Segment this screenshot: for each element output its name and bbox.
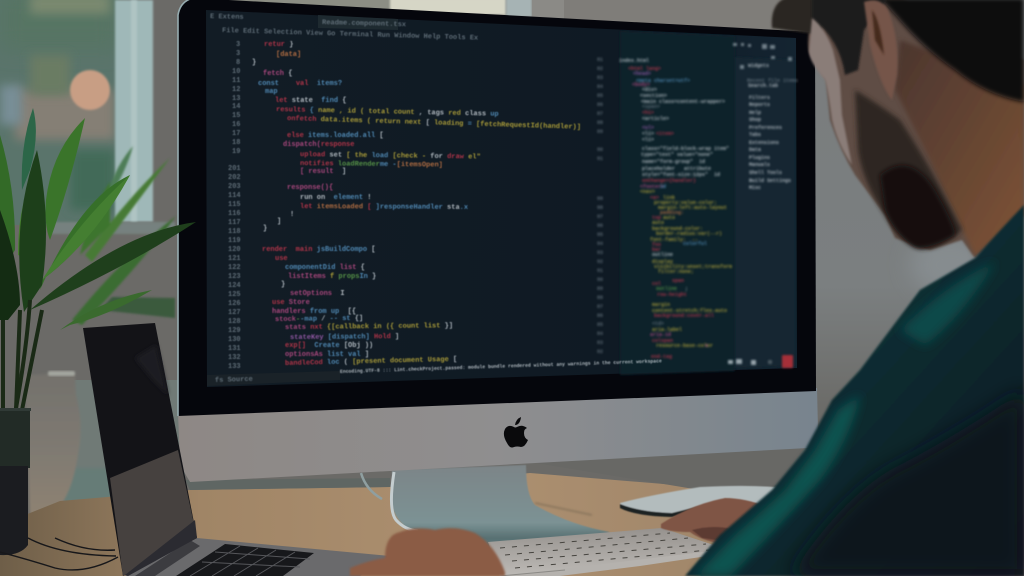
right code lines: background-color:: [652, 226, 703, 232]
line numbers: 3: [236, 41, 240, 49]
right code lines: <a>: [650, 195, 659, 201]
code editor text: [210, 13, 662, 385]
sidebar list: Preferences: [749, 125, 782, 131]
left code block: use Store: [272, 299, 310, 307]
lower wall panel and vase: [25, 371, 185, 514]
line numbers: 127: [228, 309, 241, 317]
line numbers: 201: [228, 165, 241, 173]
right code lines: <body>: [632, 82, 650, 88]
neck: [895, 40, 1024, 256]
right code lines: top: [652, 215, 661, 221]
front hair and sideburn: [812, 0, 888, 75]
left code block: componentDid list {: [285, 264, 365, 272]
active tab: [318, 15, 398, 30]
minimap line numbers: 90: [597, 277, 603, 283]
editor menu bar: [210, 13, 479, 43]
minimap line numbers: 81: [597, 57, 603, 63]
editor menu bar: File Edit Selection View Go Terminal Run Window Help Tools Ex: [222, 27, 479, 43]
minimap line numbers: 91: [597, 268, 603, 274]
long dark leaf overlapping monitor: [30, 222, 196, 310]
minimap line numbers: 84: [597, 84, 603, 90]
right code lines: <meta charset=utf>: [636, 78, 690, 84]
beard: [855, 90, 962, 249]
right code lines: <nav>: [640, 189, 655, 195]
line numbers: 122: [228, 264, 241, 272]
left code block: }: [252, 59, 256, 67]
sidebar list: Misc: [749, 185, 761, 191]
minimap line numbers: 85: [597, 322, 603, 328]
right code lines: <div>: [642, 87, 657, 93]
dark lower fronds: [60, 290, 152, 330]
left code block: stateKey [dispatch] Hold ]: [290, 333, 399, 342]
left code block: }: [281, 281, 285, 289]
left hand: [350, 528, 505, 576]
sidebar list: Tabs: [749, 132, 761, 138]
left code block: }: [263, 225, 267, 233]
right code lines: end-tag: [651, 354, 672, 360]
stems: [3, 300, 42, 440]
left leaf: [0, 135, 15, 275]
sidebar list: Search.tab: [748, 83, 778, 89]
line numbers: 114: [228, 192, 241, 200]
line numbers: 19: [232, 148, 240, 156]
right code lines: padding:: [660, 210, 684, 216]
line numbers: 125: [228, 291, 241, 299]
left code block: [252, 41, 581, 368]
right editor pane: [620, 31, 735, 375]
left code block: [data]: [276, 51, 301, 59]
line numbers: 3: [236, 50, 240, 58]
right code lines: placeholder attribute: [642, 166, 711, 172]
shirt: [685, 205, 1024, 576]
right code lines: aria-label: [652, 327, 682, 333]
right code lines: <td>: [652, 321, 664, 327]
minimap line numbers: 97: [597, 214, 603, 220]
minimap line numbers: 86: [597, 313, 603, 319]
left code block: !: [290, 211, 294, 219]
left code block: ]: [277, 218, 281, 226]
left code block: dispatch(response: [283, 141, 354, 149]
right code lines: id: [657, 184, 666, 190]
right code lines: margin-left:auto-layout: [658, 205, 727, 211]
line numbers: 16: [232, 121, 240, 129]
laptop base: [125, 538, 390, 576]
glass vase and pot: [0, 408, 31, 555]
line numbers: 132: [228, 354, 241, 362]
left code block: upload set [ the load [check - for draw el": [300, 151, 481, 162]
left code block: fetch {: [263, 70, 292, 78]
minimap line numbers: [597, 57, 603, 355]
left code block: use: [275, 255, 288, 263]
sidebar list: Help: [749, 110, 761, 116]
screen: [206, 10, 797, 387]
sidebar list: Widgets: [748, 63, 769, 69]
right code lines: <article>: [642, 116, 669, 122]
line numbers: 18: [232, 139, 240, 147]
shirt highlight: [695, 395, 860, 576]
left code block: const val items?: [258, 80, 342, 88]
right code lines: <head>: [633, 71, 651, 77]
cables: [0, 538, 118, 570]
laptop lid: [83, 323, 197, 576]
line numbers: 131: [228, 345, 241, 353]
right code lines: auto: [660, 215, 675, 221]
right code lines: background:cover-all: [654, 313, 714, 319]
right code lines: bar: [652, 247, 661, 253]
laptop keys: [176, 544, 314, 576]
ear: [864, 0, 898, 100]
sidebar list: Data: [749, 147, 761, 153]
line numbers: 10: [232, 68, 240, 76]
head and face base: [808, 0, 1024, 258]
right code lines: property:value-color;: [654, 200, 717, 206]
right code lines: <h1>: [642, 110, 654, 116]
left code block: stock--map / -- st {]: [275, 315, 363, 324]
line numbers: 17: [232, 130, 240, 138]
line numbers: 14: [232, 103, 240, 111]
sidebar list: Shop: [749, 117, 761, 123]
minimap line numbers: 84: [597, 331, 603, 337]
blurred background leaves: [72, 146, 176, 325]
right code lines: <item>: [656, 131, 674, 137]
bottom toolbar icons: [728, 359, 772, 365]
line numbers: 133: [228, 363, 241, 371]
right code lines: auto: [652, 220, 664, 226]
sidebar list: Plugins: [749, 155, 770, 161]
right code lines: <li>: [642, 131, 654, 137]
minimap line numbers: 89: [597, 286, 603, 292]
line numbers: [228, 41, 241, 371]
left code block: response(){: [287, 184, 333, 192]
right code lines: colspan: [652, 338, 673, 344]
line numbers: 126: [228, 300, 241, 308]
line numbers: 116: [228, 210, 241, 218]
bright window strip behind monitor: [195, 0, 564, 19]
right code lines: span: [672, 278, 684, 284]
right code lines: resource-base-color: [656, 343, 713, 349]
line numbers: 123: [228, 273, 241, 281]
lit face: [809, 18, 852, 165]
right code lines: <html lang>: [628, 66, 661, 72]
left code block: setOptions I: [290, 290, 345, 298]
plant: [0, 108, 176, 440]
right code lines: <section>: [640, 93, 667, 99]
line numbers: 129: [228, 327, 241, 335]
right code lines: outline: [656, 286, 677, 292]
monitor: [178, 0, 818, 482]
monitor chin: [178, 388, 818, 482]
icon: apple logo: [504, 417, 528, 448]
person: [685, 0, 1024, 576]
right code lines: aria-id: [650, 332, 671, 338]
right code lines: row-height: [657, 292, 687, 298]
right code lines: foo: [652, 242, 661, 248]
right code lines: link: [660, 195, 675, 201]
striped leaf: [22, 108, 36, 190]
minimap line numbers: 91: [597, 156, 603, 162]
right code lines: <ul>: [642, 125, 654, 131]
left code block: let itemsLoaded [ ]responseHandler sta.x: [300, 203, 469, 212]
sidebar list: Filters: [749, 95, 770, 101]
right code lines: class="field-block-wrap item": [642, 146, 729, 152]
laptop: [83, 323, 390, 576]
monitor bezel: [178, 0, 816, 416]
sidebar list: Reports: [749, 102, 770, 108]
sidebar list: [747, 63, 798, 191]
left code block: retur }: [264, 41, 293, 49]
minimap line numbers: 82: [597, 349, 603, 355]
status bar label: fs Source: [215, 376, 253, 385]
minimap line numbers: 90: [597, 147, 603, 153]
wall shadow beneath monitor: [530, 446, 812, 498]
left code block: results { name , id ( total count , tags red class up: [276, 106, 499, 119]
left code block: render main jsBuildCompo [: [262, 246, 375, 254]
right code lines: visibility:unset;transform: [654, 264, 732, 270]
minimap line numbers: 95: [597, 232, 603, 238]
minimap line numbers: 94: [597, 241, 603, 247]
window sill: [50, 222, 175, 234]
right code lines: colorful: [683, 241, 707, 247]
right code lines: filter:none;: [658, 269, 694, 275]
right code lines: x: [705, 343, 708, 349]
right code lines: <span>: [642, 104, 660, 110]
status line: Encoding.UTF-8 ::: Lint.checkProject.passed: module bundle rendered without any warnings in the current workspace: [340, 358, 662, 375]
editor menu bar: Readme.component.tsx: [322, 19, 407, 29]
right code lines: font-family: --: [650, 237, 698, 243]
left code block: handlers from up [{: [272, 308, 356, 316]
bright leaf: [46, 118, 85, 240]
left code block: onfetch data.items ( return next [ loading = [fetchRequestId(handler)]: [287, 115, 581, 132]
right code lines: col: [652, 281, 661, 287]
line numbers: 121: [228, 255, 241, 263]
right code lines: <main class=content-wrapper>: [641, 99, 725, 105]
left code block: optionsAs list val ]: [285, 351, 369, 359]
hair: [880, 0, 1024, 102]
right code lines: outline: [652, 252, 673, 258]
minimap line numbers: 88: [597, 295, 603, 301]
right code lines: content-stretch;flex-auto: [652, 308, 727, 314]
minimap line numbers: 83: [597, 75, 603, 81]
minimap line numbers: 99: [597, 196, 603, 202]
line numbers: 8: [236, 59, 240, 67]
right code lines: ;: [682, 286, 688, 292]
line numbers: 120: [228, 246, 241, 254]
right code lines: type="text" value="none": [641, 152, 713, 158]
minimap line numbers: 98: [597, 205, 603, 211]
minimap line numbers: 86: [597, 102, 603, 108]
sidebar list: Shell Tools: [749, 170, 782, 176]
sidebar list: Build Settings: [749, 178, 791, 184]
right code lines: [619, 58, 732, 360]
right editor pane code: [597, 43, 798, 368]
left dark leaf: [0, 210, 20, 320]
minimap line numbers: 82: [597, 66, 603, 72]
right hand: [661, 498, 768, 545]
red button: [782, 355, 793, 368]
sidebar list: Extensions: [749, 140, 779, 146]
right code lines: index.html: [619, 58, 649, 64]
right code lines: onChange={handler}: [642, 178, 696, 184]
back hair curl: [772, 0, 830, 35]
right code lines: display: [652, 259, 673, 265]
right code lines: margin: [652, 302, 670, 308]
sidebar panel: [735, 57, 795, 368]
line numbers: 117: [228, 219, 241, 227]
right code lines: <footer>: [640, 184, 664, 190]
left code block: listItems f propsIn }: [288, 273, 376, 281]
line numbers: 130: [228, 336, 241, 344]
white vase: [25, 372, 81, 514]
line numbers: 13: [232, 95, 240, 103]
sidebar list: Manuals: [749, 162, 770, 168]
minimap line numbers: 83: [597, 340, 603, 346]
left code block: bandleCod loc ( [present document Usage [: [285, 356, 457, 368]
left code block: else items.loaded.all [: [287, 132, 384, 140]
line numbers: 202: [228, 174, 241, 182]
minimap line numbers: 87: [597, 304, 603, 310]
line numbers: 12: [232, 86, 240, 94]
editor menu bar: E Extens: [210, 13, 244, 22]
bokeh light: [70, 70, 110, 110]
line numbers: 124: [228, 282, 241, 290]
left code block: let state find {: [275, 97, 346, 105]
minimap line numbers: 89: [597, 129, 603, 135]
monitor stand with cable: [361, 465, 610, 570]
line numbers: 118: [228, 228, 241, 236]
minimap line numbers: 87: [597, 111, 603, 117]
left code block: exp[] Create [Obj )): [285, 342, 373, 350]
minimap line numbers: 85: [597, 93, 603, 99]
line numbers: 203: [228, 183, 241, 191]
left code block: [ result ]: [300, 168, 346, 176]
dark centre leaf: [19, 150, 46, 312]
left code block: stats nxt {[callback in ({ count list }]: [285, 322, 453, 332]
large leaf: [40, 175, 130, 290]
line numbers: 15: [232, 112, 240, 120]
status bar: [207, 371, 340, 386]
right code lines: name="form-group" id: [642, 159, 705, 165]
window with blurred garden view: [0, 0, 175, 234]
line numbers: 128: [228, 318, 241, 326]
sidebar list: Recent file items: [747, 78, 798, 84]
left code block: run on element !: [300, 194, 371, 202]
toolbar icons top right: [733, 43, 792, 69]
right code lines: style="font-size:12px" id: [642, 172, 720, 178]
left code block: map: [265, 88, 278, 96]
line numbers: 115: [228, 201, 241, 209]
right code lines: <li>: [642, 137, 654, 143]
minimap line numbers: 96: [597, 223, 603, 229]
white keyboard: [488, 528, 728, 576]
minimap line numbers: 92: [597, 259, 603, 265]
minimap line numbers: 88: [597, 120, 603, 126]
window frame: [115, 0, 153, 222]
notebook: [620, 486, 795, 517]
left code block: notifies loadRenderme -[itemsOpen]: [300, 160, 443, 169]
right code lines: border-radius:var(--r): [656, 231, 722, 237]
line numbers: 11: [232, 77, 240, 85]
shirt shadow: [790, 390, 1024, 576]
minimap line numbers: 93: [597, 250, 603, 256]
wood desk: [0, 473, 800, 576]
line numbers: 119: [228, 237, 241, 245]
